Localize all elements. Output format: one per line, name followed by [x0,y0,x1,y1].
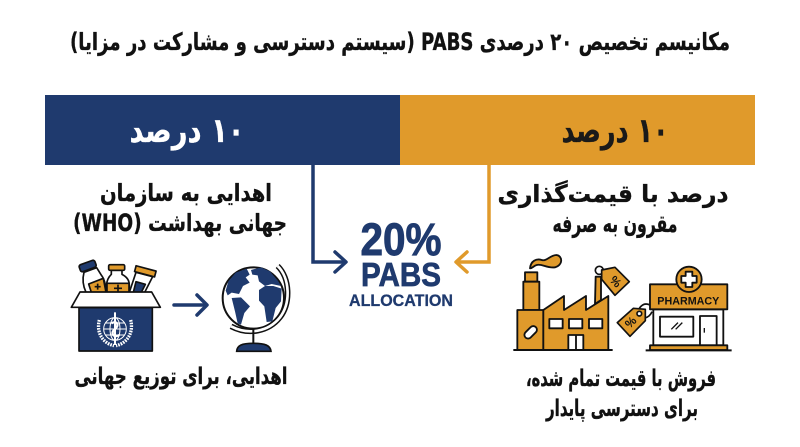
arrow: orange to center [456,165,489,272]
panel: orange header bar [400,95,755,165]
box lid [71,292,160,307]
panel: orange header bar: ۱۰ درصد [562,111,668,151]
icon: price tag on factory: % [607,273,625,291]
WHO emblem [99,312,131,346]
heading: donation to WHO [73,179,287,237]
arrow: navy to center [313,165,346,272]
title: مکانیسم تخصیص ۲۰ درصدی PABS (سیستم دسترسی و مشارکت در مزایا) [70,28,730,56]
heading: affordable pricing: مقرون به صرفه [552,210,678,238]
heading: donation to WHO: اهدایی به سازمان [100,179,272,207]
arrow: box to globe [174,295,207,315]
heading: donation to WHO: جهانی بهداشت (WHO) [73,209,287,237]
icon: factory [513,255,613,350]
caption: sold at cost: برای دسترسی پایدار [545,396,698,422]
center label: 20% PABS allocation [349,214,453,310]
bottle right [129,266,156,292]
icon: pharmacy [646,267,732,350]
bottle middle [107,265,129,292]
icon: price tag on factory [595,266,629,295]
panel: navy header bar: ۱۰ درصد [130,111,244,151]
heading: affordable pricing: درصد با قیمت‌گذاری [498,180,728,208]
icon: price tag on pharmacy [617,304,652,336]
bottle left [79,260,107,292]
icon: WHO donation box with medicines [71,260,160,351]
icon: price tag on pharmacy: % [622,313,640,331]
caption: sold at cost [526,366,716,422]
icon: pharmacy: PHARMACY [657,296,719,308]
icon: globe [223,266,288,351]
caption: donation for global distribution: اهدایی، برای توزیع جهانی [74,364,288,390]
center label: 20% PABS allocation: ALLOCATION [349,291,453,310]
center label: 20% PABS allocation: 20% [360,214,442,265]
center label: 20% PABS allocation: PABS [361,256,441,293]
box body [79,308,152,351]
panel: navy header bar [45,95,400,165]
heading: affordable pricing [498,180,728,238]
